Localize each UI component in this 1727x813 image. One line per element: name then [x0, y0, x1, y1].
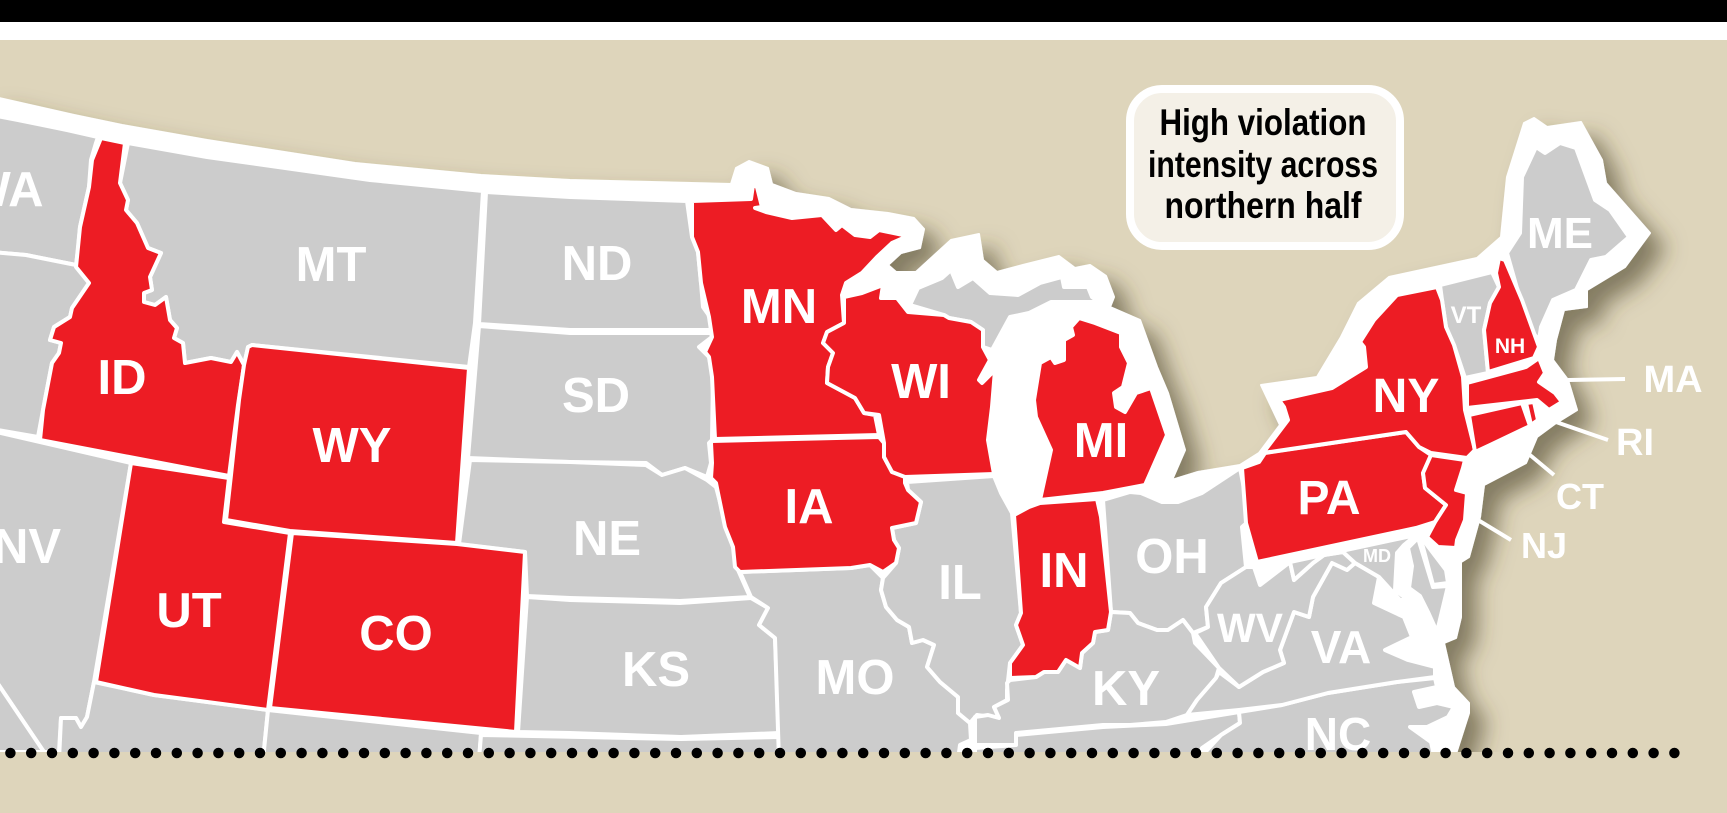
state: Long Island [1467, 450, 1520, 476]
label: ID: ID [98, 351, 146, 405]
leader: RI [1556, 422, 1608, 440]
state abbreviation labels [0, 163, 1703, 760]
state: Massachusetts [1467, 358, 1562, 410]
label: NJ: NJ [1521, 525, 1567, 566]
state: North Dakota [479, 192, 711, 330]
label: KS: KS [622, 643, 690, 697]
state: Delaware [1419, 532, 1448, 585]
state: Ohio [1103, 468, 1250, 633]
state: Minnesota [692, 185, 908, 439]
label: WY: WY [313, 419, 391, 473]
state: Virginia [1187, 563, 1435, 715]
callout: high violation intensity [1130, 89, 1400, 246]
state: Missouri [740, 565, 971, 760]
state: Utah [96, 463, 290, 710]
highlighted states in red [40, 138, 1562, 732]
state: Kentucky [975, 612, 1219, 745]
state: Iowa [711, 437, 921, 572]
state: Connecticut [1469, 403, 1530, 452]
state: Wyoming [226, 345, 469, 543]
state: Pennsylvania [1242, 432, 1446, 562]
state: Washington [0, 115, 98, 265]
label: NH: NH [1495, 335, 1525, 358]
leader: MA [1568, 379, 1625, 380]
state: Wisconsin [823, 285, 995, 477]
bottom tan band [0, 752, 1727, 813]
label: MO: MO [816, 651, 894, 705]
leader: CT [1530, 455, 1554, 475]
state: West Virginia [1195, 552, 1355, 687]
label: UT: UT [156, 584, 222, 638]
label: OH: OH [1135, 530, 1209, 584]
label: KY: KY [1092, 662, 1160, 716]
label: CT: CT [1556, 476, 1604, 517]
leader lines for small states [1478, 379, 1625, 540]
label: CO: CO [359, 607, 433, 661]
label: IA: IA [784, 480, 834, 534]
state: Idaho [40, 138, 244, 476]
callout text: northern half [1164, 185, 1362, 226]
label: VT: VT [1451, 302, 1482, 329]
label: ME: ME [1527, 209, 1593, 258]
label: MA: MA [1643, 359, 1703, 401]
label: WV: WV [1217, 605, 1284, 651]
label: IL: IL [938, 556, 982, 610]
state: Indiana [1010, 499, 1111, 678]
label: IN: IN [1040, 544, 1088, 598]
label: ND: ND [562, 237, 632, 291]
label: NY: NY [1373, 370, 1439, 423]
state: Tennessee [975, 712, 1240, 760]
label: VA: VA [1311, 621, 1371, 673]
state: North Carolina [1198, 678, 1454, 760]
state: Oklahoma [479, 735, 779, 760]
state: South Dakota [468, 326, 713, 477]
label: RI: RI [1616, 422, 1654, 464]
white land silhouette with drop shadow [0, 96, 1650, 760]
state: Vermont [1440, 272, 1499, 378]
label: MI: MI [1074, 414, 1128, 468]
label: NC: NC [1305, 708, 1371, 760]
state: Nevada [0, 431, 131, 752]
state: Maryland [1290, 535, 1416, 600]
callout box [1130, 89, 1400, 246]
state: Kansas [518, 597, 779, 737]
state: Michigan upper peninsula [910, 270, 1099, 350]
label: NE: NE [573, 512, 641, 566]
label: MD: MD [1363, 546, 1391, 566]
label: MT: MT [296, 238, 366, 292]
state: Nebraska [459, 460, 750, 601]
top black bar [0, 0, 1727, 22]
callout text: High violation [1160, 102, 1366, 143]
state: Rhode Island [1526, 402, 1538, 425]
callout text: intensity across [1148, 144, 1378, 185]
leader: NJ [1478, 520, 1511, 540]
state: New York [1263, 287, 1475, 458]
label: PA: PA [1297, 472, 1361, 525]
state: Maine [1507, 143, 1629, 340]
state: Maryland eastern shore [1408, 538, 1448, 632]
state: Colorado [270, 533, 525, 732]
state: Michigan lower peninsula [1034, 318, 1167, 500]
non-highlighted states in gray [0, 115, 1629, 760]
callout text [1148, 102, 1378, 226]
label: WI: WI [891, 355, 951, 409]
label: SD: SD [562, 369, 630, 423]
state: New Jersey [1423, 455, 1467, 548]
dotted rule [10, 748, 1676, 758]
state: New Mexico [263, 710, 481, 760]
state: Illinois [881, 476, 1023, 723]
state: Arizona [59, 682, 268, 760]
state: Montana [120, 143, 483, 367]
state: New Hampshire [1484, 258, 1539, 372]
state: California [0, 675, 44, 752]
state: Oregon [0, 252, 89, 437]
label: MN: MN [741, 280, 817, 334]
